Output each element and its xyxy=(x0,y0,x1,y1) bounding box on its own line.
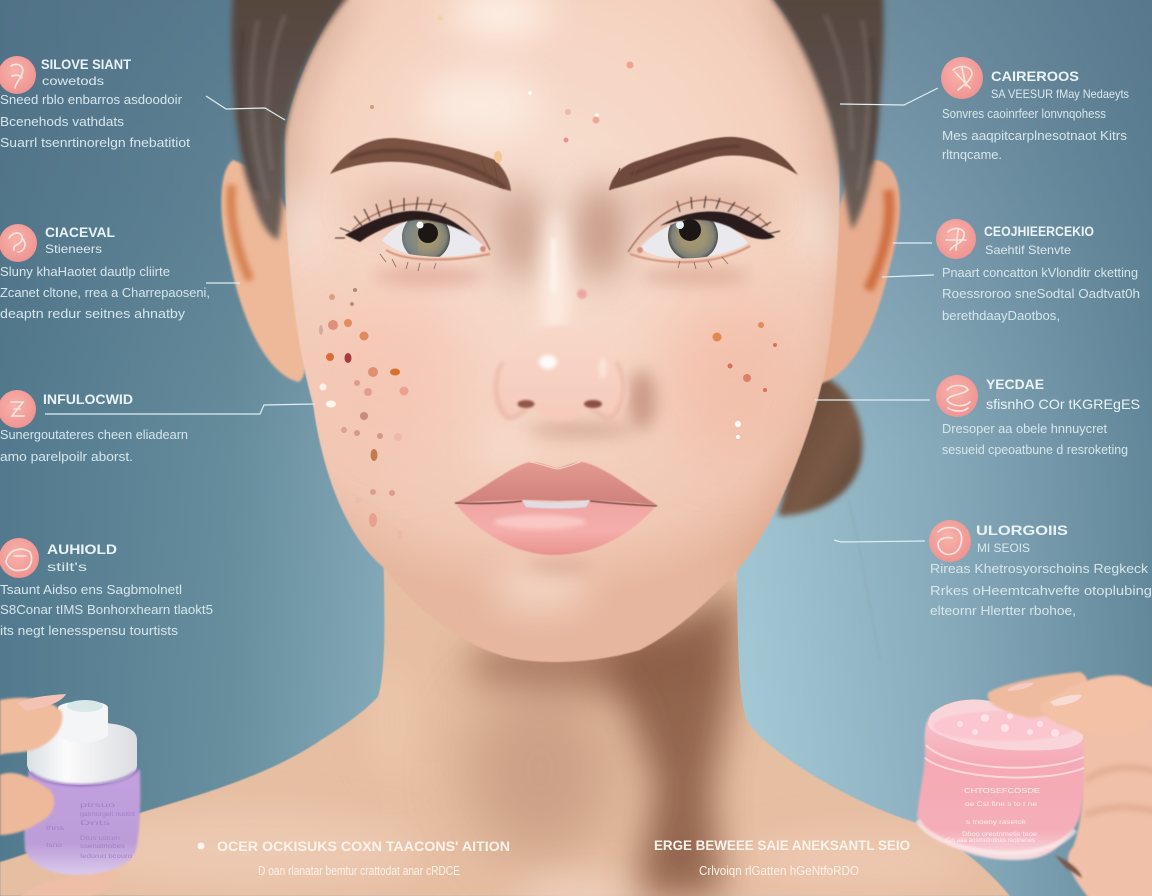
hair bun xyxy=(778,372,880,660)
powder texture xyxy=(957,713,1059,737)
panel: left callout 1: SILOVE SIANT xyxy=(41,56,131,72)
panel: left callout 4: S8Conar tIMS Bonhorxhearn tlaokt5 xyxy=(0,603,213,617)
panel: right callout 1: CAIREROOS xyxy=(991,68,1079,84)
panel: right callout 4: ULORGOIIS xyxy=(976,522,1068,538)
right eye xyxy=(628,196,780,269)
temple highlights xyxy=(290,185,314,265)
icon: right 4 xyxy=(929,520,971,562)
panel: left callout 3: INFULOCWID xyxy=(43,391,133,407)
icon: left 1 xyxy=(0,56,36,94)
panel: right callout 2: berethdaayDaotbos, xyxy=(942,309,1060,323)
panel: left callout 1: Bcenehods vathdats xyxy=(0,115,124,129)
bottom caption left: D oan rlanatar bemtur crattodat anar cRDCE xyxy=(258,863,460,878)
icon: right 3 xyxy=(936,375,978,417)
pink jar label: Dboo oreotnmetis teoe xyxy=(962,832,1038,838)
connector lines xyxy=(45,88,938,542)
panel: left callout 4: its negt lenesspensu tourtists xyxy=(0,624,178,638)
panel: right callout 4: elteornr Hlertter rbohoe, xyxy=(930,604,1076,618)
panel: right callout 4: Rireas Khetrosyorschoins Regkeck xyxy=(930,562,1149,576)
panel: left callout 3: Sunergoutateres cheen eliadearn xyxy=(0,428,188,442)
panel: left callout 3 xyxy=(0,390,188,464)
panel: right callout 2: CEOJHIEERCEKIO xyxy=(984,223,1094,239)
panel: left callout 3: amo parelpoilr aborst. xyxy=(0,450,133,464)
neck and shoulders xyxy=(0,540,1010,896)
purple jar body xyxy=(24,770,140,875)
acne spots xyxy=(319,15,777,540)
panel: left callout 1: Suarrl tsenrtinorelgn fnebatitiot xyxy=(0,136,191,150)
icon: left 4 xyxy=(0,538,39,578)
icon: right 1 xyxy=(941,57,983,99)
nose xyxy=(482,210,656,466)
panel: left callout 2: CIACEVAL xyxy=(45,224,115,240)
panel: right callout 1: Sonvres caoinrfeer lonvnqohess xyxy=(942,107,1106,121)
ears xyxy=(221,160,900,385)
hand palm xyxy=(1060,684,1152,896)
panel: right callout 4 xyxy=(929,520,1152,618)
panel: left callout 2: Sluny khaHaotet dautlp cliirte xyxy=(0,265,170,279)
icon: right 2 xyxy=(936,219,976,259)
pink jar label: oe Cst fine s to t ne xyxy=(965,802,1038,808)
panel: left callout 2 xyxy=(0,224,210,321)
right ear xyxy=(807,160,900,385)
panel: right callout 1 xyxy=(941,57,1129,162)
panel: left callout 1: Sneed rblo enbarros asdoodoir xyxy=(0,93,182,107)
panel: left callout 1 xyxy=(0,56,191,150)
eye socket shading xyxy=(353,187,497,223)
panel: right callout 2: Roessroroo sneSodtal Oadtvat0h xyxy=(942,287,1140,301)
cap xyxy=(27,722,137,785)
jar label: ptrsuo xyxy=(80,802,116,809)
panel: left callout 4: Tsaunt Aidso ens Sagbmolnetl xyxy=(0,583,182,597)
left ear xyxy=(221,160,308,382)
jar label: gatmorgelt nuotnt xyxy=(80,811,135,818)
panel: right callout 2: Pnaart concatton kVlonditr cketting xyxy=(942,266,1138,280)
lips xyxy=(455,462,657,555)
product: pink jar with hand xyxy=(917,672,1152,896)
jar label: Dnts xyxy=(80,820,112,827)
hair xyxy=(231,0,884,240)
product: purple jar with hand xyxy=(0,694,140,896)
panel: right callout 3: sfisnhO COr tKGREgES xyxy=(986,396,1140,412)
eyebrows xyxy=(330,137,798,191)
panel: left callout 2: Zcanet cltone, rrea a Charrepaoseni, xyxy=(0,286,210,300)
bottom caption right xyxy=(654,837,910,878)
panel: left callout 4: AUHIOLD xyxy=(47,541,117,557)
upper finger xyxy=(0,698,62,755)
neck shadow under chin xyxy=(465,635,715,695)
panel: right callout 3: Dresoper aa obele hnnuycret xyxy=(942,422,1108,436)
panel: right callout 4: MI SEOIS xyxy=(977,541,1030,555)
pink jar label: s tnoeny rasetok xyxy=(966,820,1027,826)
panel: right callout 2 xyxy=(936,219,1140,323)
jar label: ssenatnobes xyxy=(80,843,126,850)
lower thumb xyxy=(0,773,54,835)
panel: left callout 4 xyxy=(0,538,213,638)
jar label: Dtus ustom xyxy=(80,835,120,842)
panel: left callout 2: deaptn redur seitnes ahnatby xyxy=(0,307,186,321)
pink jar label: rDn aaa aosmetrotnas reotnenes xyxy=(945,838,1035,844)
bottom caption left: OCER OCKISUKS COXN TAACONS' AITION xyxy=(217,838,510,854)
panel: right callout 3 xyxy=(936,375,1140,457)
hairline shadow xyxy=(284,0,841,240)
bottom caption right: Crlvoiqn rlGatten hGeNtfoRDO xyxy=(699,863,859,878)
panel: right callout 2: Saehtif Stenvte xyxy=(985,243,1071,257)
panel: right callout 1: SA VEESUR fMay Nedaeyts xyxy=(991,87,1129,101)
jar label: Isno xyxy=(46,842,62,849)
jar label: Iedoruo bcouro xyxy=(80,853,132,860)
panel: left callout 2: Stieneers xyxy=(45,242,102,256)
face shading xyxy=(738,272,836,568)
lower finger xyxy=(20,872,120,896)
icon: left 2 xyxy=(0,224,37,262)
panel: left callout 4: stilt's xyxy=(47,560,87,574)
pink jar label xyxy=(945,788,1040,844)
fingers xyxy=(988,672,1087,718)
face xyxy=(284,0,900,662)
icon: left 3 xyxy=(0,390,36,428)
left eye xyxy=(335,197,490,271)
jar label: lhns xyxy=(46,825,65,832)
bottom caption left xyxy=(198,838,510,878)
jar label xyxy=(46,802,135,860)
bottom caption right: ERGE BEWEEE SAIE ANEKSANTL SEIO xyxy=(654,837,910,853)
panel: right callout 3: YECDAE xyxy=(986,376,1044,392)
panel: right callout 1: Mes aaqpitcarplnesotnaot Kitrs xyxy=(942,129,1127,143)
pink jar xyxy=(917,713,1084,860)
panel: right callout 4: Rrkes oHeemtcahvefte otoplubing xyxy=(930,584,1152,598)
pink jar label: CHTOSEFCOSDE xyxy=(964,788,1040,795)
panel: right callout 1: rltnqcame. xyxy=(942,148,1002,162)
panel: left callout 1: cowetods xyxy=(42,74,104,88)
panel: right callout 3: sesueid cpeoatbune d resroketing xyxy=(942,443,1128,457)
